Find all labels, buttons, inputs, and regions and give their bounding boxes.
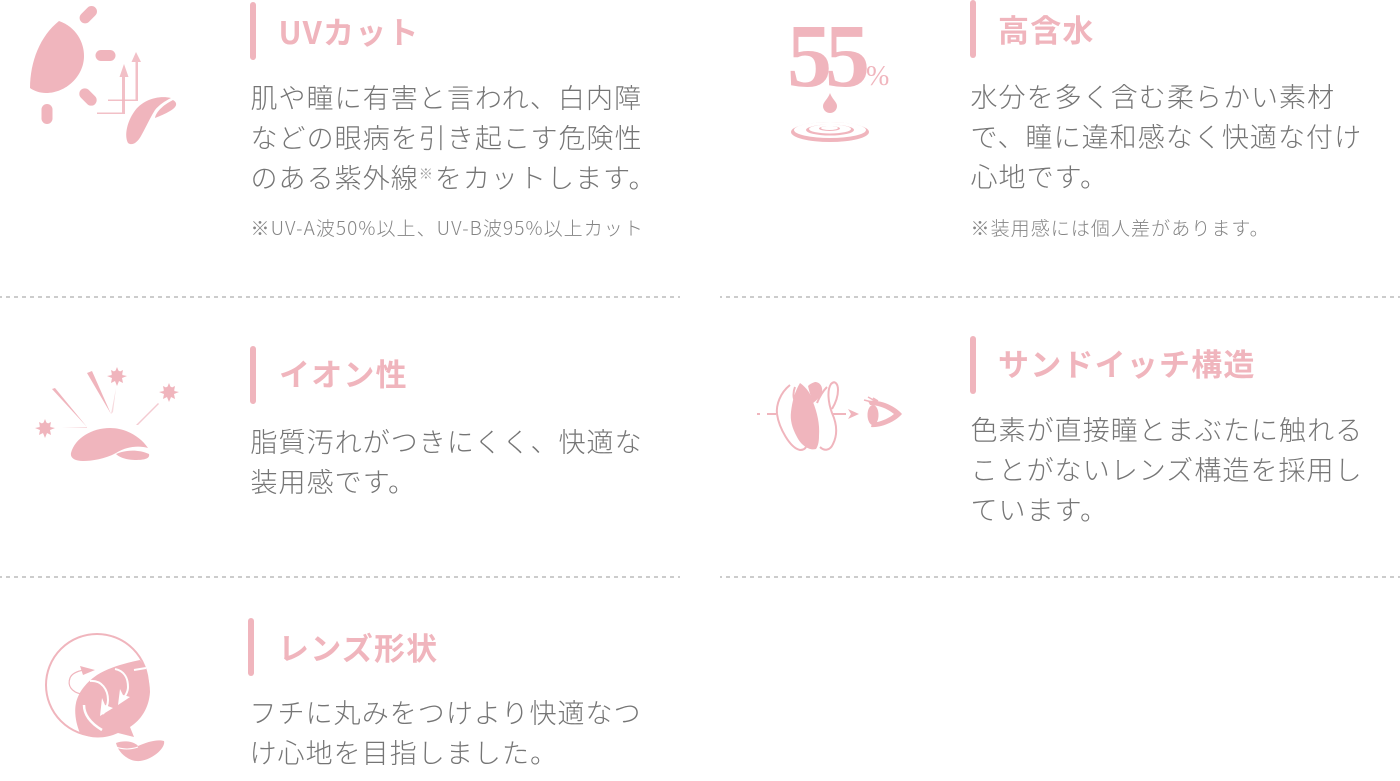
divider left 2 bbox=[0, 576, 680, 578]
divider left 1 bbox=[0, 296, 680, 298]
divider right 2 bbox=[720, 576, 1400, 578]
body text: のある紫外線※をカットします。 bbox=[250, 157, 657, 196]
body text: で、瞳に違和感なく快適な付け bbox=[970, 116, 1362, 155]
icon: sun, rays, arrows and lens bbox=[30, 6, 176, 144]
heading bar bbox=[970, 0, 976, 58]
body text: 脂質汚れがつきにくく、快適な bbox=[250, 421, 643, 460]
heading: 高含水 bbox=[998, 6, 1095, 51]
icon: rounded lens edge in circle bbox=[45, 633, 164, 762]
body text: 肌や瞳に有害と言われ、白内障 bbox=[250, 77, 642, 116]
divider right 1 bbox=[720, 296, 1400, 298]
body text: ています。 bbox=[970, 489, 1108, 528]
icon: 55 percent with water drop: % bbox=[866, 61, 889, 92]
body text: 色素が直接瞳とまぶたに触れる bbox=[970, 409, 1363, 448]
body text: 装用感です。 bbox=[250, 461, 416, 500]
panel: UV cut bbox=[30, 2, 657, 241]
footnote: ※装用感には個人差があります。 bbox=[970, 214, 1270, 241]
body text: フチに丸みをつけより快適なつ bbox=[250, 692, 642, 731]
body text bbox=[250, 77, 657, 196]
icon: 55 percent with water drop: 55 bbox=[787, 7, 867, 106]
body text bbox=[250, 692, 642, 771]
heading bar bbox=[248, 618, 254, 676]
panel: lens shape bbox=[45, 618, 642, 771]
body text bbox=[970, 76, 1362, 195]
heading: サンドイッチ構造 bbox=[998, 340, 1256, 385]
body text bbox=[970, 409, 1363, 528]
body text: け心地を目指しました。 bbox=[250, 732, 558, 771]
heading bar bbox=[970, 336, 976, 394]
heading: イオン性 bbox=[279, 350, 408, 395]
icon: lens with sparkles bbox=[35, 367, 179, 461]
panel: high water content bbox=[787, 0, 1362, 241]
body text: などの眼病を引き起こす危険性 bbox=[250, 117, 643, 156]
body text: 心地です。 bbox=[970, 156, 1108, 195]
body text: ことがないレンズ構造を採用し bbox=[970, 449, 1363, 488]
icon: 55 percent with water drop bbox=[787, 7, 889, 142]
heading bar bbox=[250, 2, 256, 60]
icon: lens layers and eye bbox=[757, 381, 902, 451]
footnote: ※UV-A波50%以上、UV-B波95%以上カット bbox=[250, 214, 644, 241]
panel: ionic bbox=[35, 346, 643, 500]
body text: 水分を多く含む柔らかい素材 bbox=[970, 76, 1335, 115]
heading bar bbox=[250, 346, 256, 404]
heading: UVカット bbox=[278, 8, 420, 53]
heading: レンズ形状 bbox=[278, 624, 438, 669]
body text bbox=[250, 421, 643, 500]
panel: sandwich structure bbox=[757, 336, 1363, 528]
